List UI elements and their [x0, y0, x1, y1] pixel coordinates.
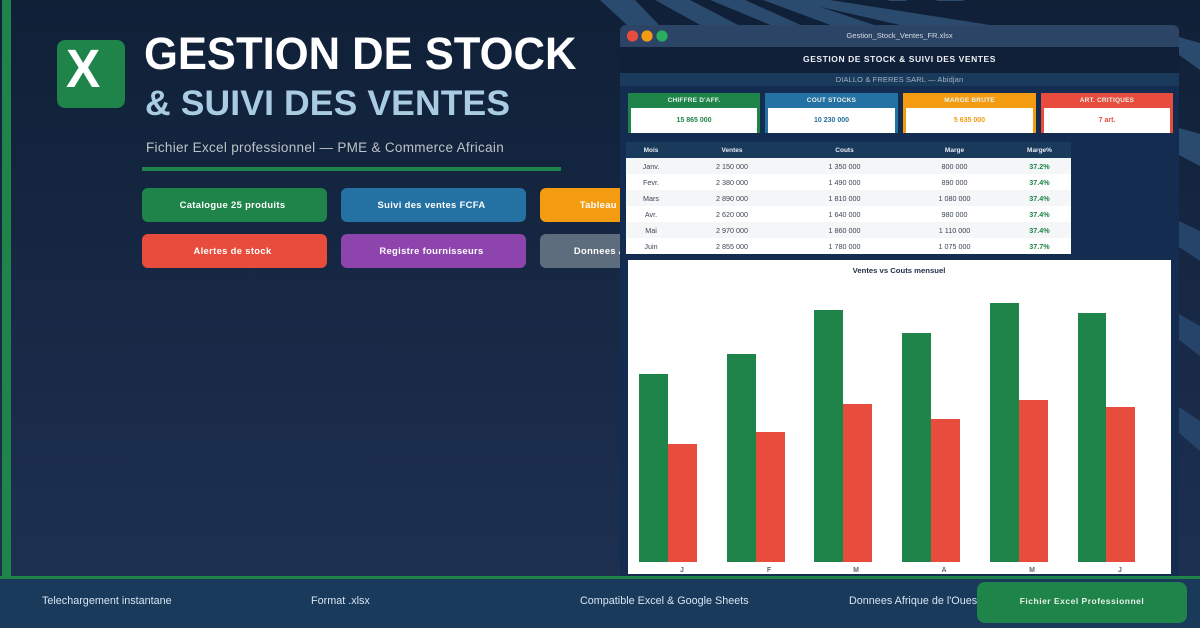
data table: 37.4%: [1029, 210, 1050, 218]
data table: Marge%: [1027, 146, 1052, 154]
chip: donnees: [540, 234, 725, 268]
data table: Ventes: [722, 146, 742, 154]
KPI card: marge brute: 5 635 000: [954, 117, 985, 124]
icon: window buttons: [626, 30, 668, 42]
data table: 2 150 000: [716, 162, 748, 170]
left accent bar: [2, 0, 11, 578]
footer button: [977, 582, 1187, 623]
KPI card: cout stocks: [765, 93, 898, 133]
data table: 1 780 000: [828, 242, 860, 250]
panel: spreadsheet window: [620, 25, 1179, 578]
KPI card: marge brute: [903, 93, 1036, 133]
data table: 1 490 000: [828, 178, 860, 186]
KPI card: articles critiques: ART. CRITIQUES: [1080, 97, 1134, 104]
chip: fournisseurs: [341, 234, 526, 268]
KPI card: cout stocks: 10 230 000: [814, 117, 849, 124]
data table: [626, 142, 1071, 254]
data table: Marge: [945, 146, 964, 154]
data table: 890 000: [942, 178, 967, 186]
chip: alertes: Alertes de stock: [193, 245, 272, 256]
month labels: J: [1118, 567, 1122, 574]
KPI card: articles critiques: 7 art.: [1099, 117, 1115, 124]
month labels: F: [767, 567, 772, 574]
data table: 2 380 000: [716, 178, 748, 186]
data table: Couts: [835, 146, 854, 154]
chip: tableau: [540, 188, 725, 222]
data table: 37.4%: [1029, 178, 1050, 186]
chip: catalogue: [142, 188, 327, 222]
feature chips: [142, 188, 685, 268]
footer text: format: Format .xlsx: [311, 595, 370, 607]
footer top line: [0, 576, 1200, 579]
data table: Mars: [643, 194, 659, 202]
KPI card: chiffre d'affaires: [628, 93, 760, 133]
data table: Fevr.: [643, 178, 659, 186]
month labels: [680, 567, 1122, 574]
data table: 2 890 000: [716, 194, 748, 202]
month labels: M: [853, 567, 859, 574]
data table: Janv.: [643, 162, 659, 170]
data table: 37.4%: [1029, 194, 1050, 202]
data table: 37.7%: [1029, 242, 1050, 250]
chip: donnees: Donnees Afrique Ouest: [574, 245, 685, 256]
data table: 2 620 000: [716, 210, 748, 218]
data table: 1 640 000: [828, 210, 860, 218]
file name: Gestion_Stock_Ventes_FR.xlsx: [846, 31, 953, 40]
KPI card: cout stocks: COUT STOCKS: [807, 97, 856, 104]
KPI card: marge brute: MARGE BRUTE: [944, 97, 995, 104]
data table: 1 860 000: [828, 226, 860, 234]
sheet company band: [620, 73, 1179, 86]
KPI card: chiffre d'affaires: CHIFFRE D'AFF.: [668, 97, 720, 104]
data table: 1 350 000: [828, 162, 860, 170]
data table: 1 075 000: [938, 242, 970, 250]
bars: couts: [668, 400, 1135, 562]
icon: Excel logo: [57, 40, 125, 108]
footer text: donnees: Donnees Afrique de l'Ouest: [849, 595, 980, 607]
bars: ventes: [639, 303, 1106, 562]
tagline: Fichier Excel professionnel — PME & Commerce Africain: [146, 140, 504, 155]
chip: alertes: [142, 234, 327, 268]
icon: Excel logo: X: [66, 38, 100, 98]
subtitle line: & SUIVI DES VENTES: [145, 83, 510, 123]
window title bar: [620, 25, 1179, 47]
title: GESTION DE STOCK: [144, 28, 576, 79]
data table: Avr.: [645, 210, 657, 218]
month labels: J: [680, 567, 684, 574]
data table: Mai: [645, 226, 657, 234]
footer button: Fichier Excel Professionnel: [1020, 596, 1144, 606]
bar chart: [628, 260, 1171, 574]
data table: 1 080 000: [938, 194, 970, 202]
data table: Mois: [644, 146, 658, 154]
data table: 37.2%: [1029, 162, 1050, 170]
month labels: M: [1029, 567, 1035, 574]
data table: 1 110 000: [939, 226, 970, 234]
chip: ventes: Suivi des ventes FCFA: [378, 199, 485, 210]
data table: 1 810 000: [828, 194, 860, 202]
footer text: telechargement: Telechargement instantane: [42, 595, 172, 607]
footer text: compatibilite: Compatible Excel & Google Sheets: [580, 595, 749, 607]
chip: ventes: [341, 188, 526, 222]
chip: catalogue: Catalogue 25 produits: [180, 199, 285, 210]
month labels: A: [941, 567, 947, 574]
data table: Juin: [644, 242, 658, 250]
data table: 980 000: [942, 210, 967, 218]
sheet company band: DIALLO & FRERES SARL — Abidjan: [836, 75, 963, 84]
sheet heading: GESTION DE STOCK & SUIVI DES VENTES: [803, 54, 996, 64]
divider: [142, 167, 561, 171]
chip: fournisseurs: Registre fournisseurs: [379, 245, 484, 256]
data table: 37.4%: [1029, 226, 1050, 234]
footer band: [0, 578, 1200, 628]
KPI card: chiffre d'affaires: 15 865 000: [676, 117, 712, 124]
data table: 2 855 000: [716, 242, 748, 250]
chip: tableau: Tableau de bord KPI: [580, 199, 676, 210]
sheet heading: [620, 47, 1179, 73]
chart title: Ventes vs Couts mensuel: [853, 266, 945, 275]
data table: 2 970 000: [716, 226, 748, 234]
data table: 800 000: [942, 162, 967, 170]
KPI card: articles critiques: [1041, 93, 1173, 133]
